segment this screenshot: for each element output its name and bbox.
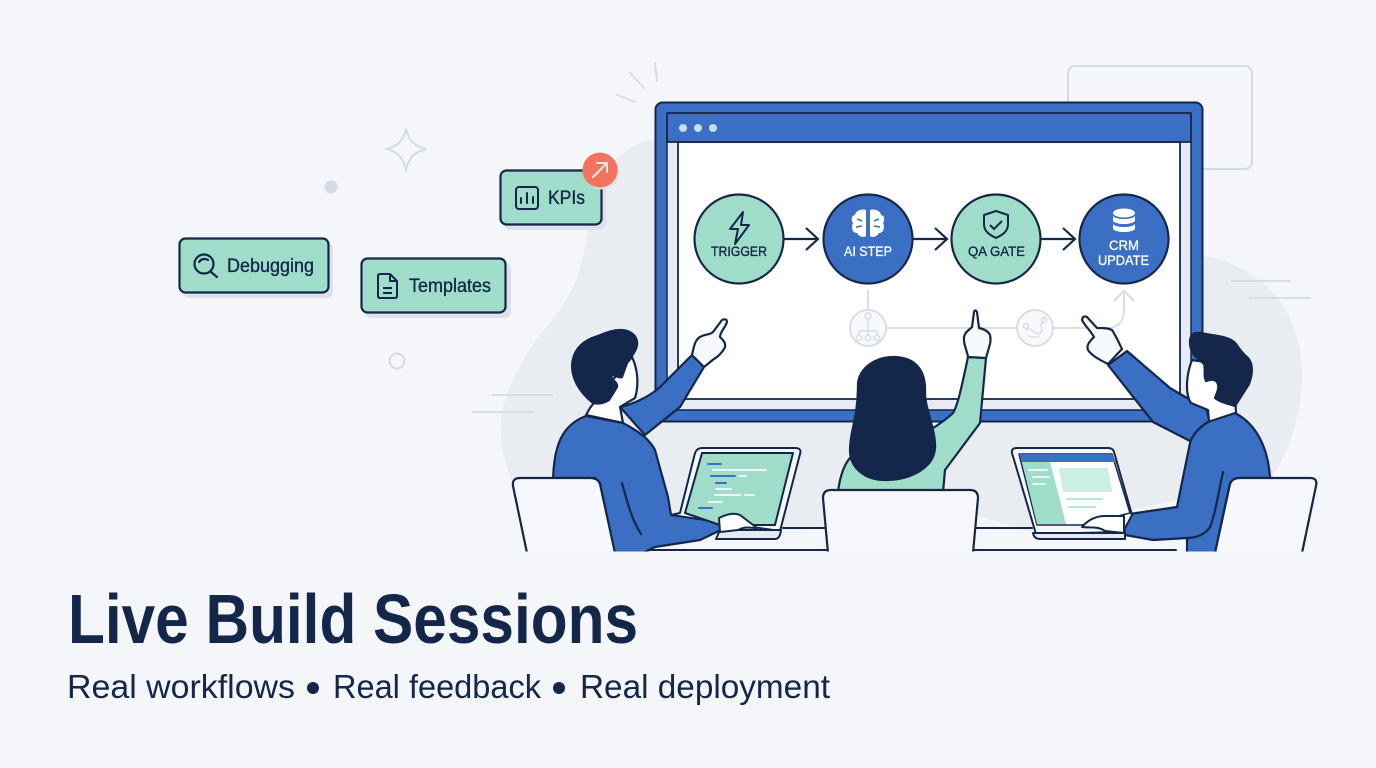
icon: bar chart [516, 187, 538, 209]
center person [823, 310, 990, 553]
decorative star [387, 129, 426, 169]
title: Live Build Sessions [68, 580, 638, 658]
chip: Debugging [180, 238, 333, 298]
node: CRM UPDATE: UPDATE [1098, 252, 1149, 268]
arrow: QA gate to CRM update [1040, 228, 1075, 250]
laptop screen with code [685, 453, 793, 525]
faint secondary flow [850, 290, 1134, 346]
chip: KPIs [500, 170, 606, 230]
icon: database [1113, 208, 1135, 232]
pointing hand [692, 319, 727, 367]
decorative outline panel [1068, 66, 1252, 169]
chair [823, 490, 978, 553]
typing hand [719, 514, 757, 532]
right laptop and desk [973, 448, 1176, 550]
hair [850, 357, 935, 480]
subtitle: Real feedback [333, 668, 541, 705]
left laptop and desk [648, 448, 828, 550]
node: TRIGGER [694, 194, 784, 284]
window title bar [667, 113, 1191, 142]
presentation screen [656, 102, 1202, 422]
face and collar [586, 357, 637, 423]
icon: document [378, 274, 397, 298]
right person [1082, 316, 1316, 553]
arrow: AI step to QA gate [912, 228, 947, 250]
background blobs [501, 137, 1302, 532]
chip: Templates [362, 258, 511, 318]
laptop screen with dashboard [1019, 454, 1130, 525]
badge: growth arrow [582, 152, 620, 190]
decorative lines and sparks [473, 63, 1310, 412]
raised arm [620, 355, 704, 435]
left person [513, 319, 727, 553]
subtitle: Real deployment [580, 668, 830, 705]
node: CRM UPDATE [1080, 194, 1168, 284]
node: CRM UPDATE: CRM [1109, 237, 1139, 253]
icon: lightning bolt [730, 212, 749, 244]
node: AI STEP [824, 194, 912, 284]
arrow: trigger to AI step [783, 228, 818, 250]
node: QA GATE [952, 194, 1040, 284]
subtitle: Real workflows [67, 668, 295, 705]
hair [572, 330, 637, 404]
node: TRIGGER: TRIGGER [711, 243, 767, 259]
pointing hand [1082, 316, 1122, 364]
chair [1215, 478, 1316, 553]
typing hand [1082, 516, 1124, 533]
icon: brain [852, 209, 884, 237]
torso [553, 416, 721, 553]
node: AI STEP: AI STEP [844, 243, 892, 259]
torso [1123, 413, 1270, 553]
pointing hand [964, 310, 990, 358]
body and raised arm [838, 357, 986, 492]
chip: KPIs: KPIs [548, 188, 585, 209]
subtitle [67, 668, 830, 705]
icon: shield check [984, 211, 1008, 238]
decorative ring [390, 354, 404, 368]
raised arm [1108, 351, 1210, 442]
icon: magnifier [194, 254, 217, 277]
hair [1190, 333, 1252, 406]
decorative dot [324, 180, 338, 194]
node: QA GATE: QA GATE [968, 243, 1025, 259]
chair [513, 478, 615, 553]
chip: Templates: Templates [409, 276, 491, 297]
face [1187, 360, 1236, 422]
chip: Debugging: Debugging [227, 256, 314, 277]
